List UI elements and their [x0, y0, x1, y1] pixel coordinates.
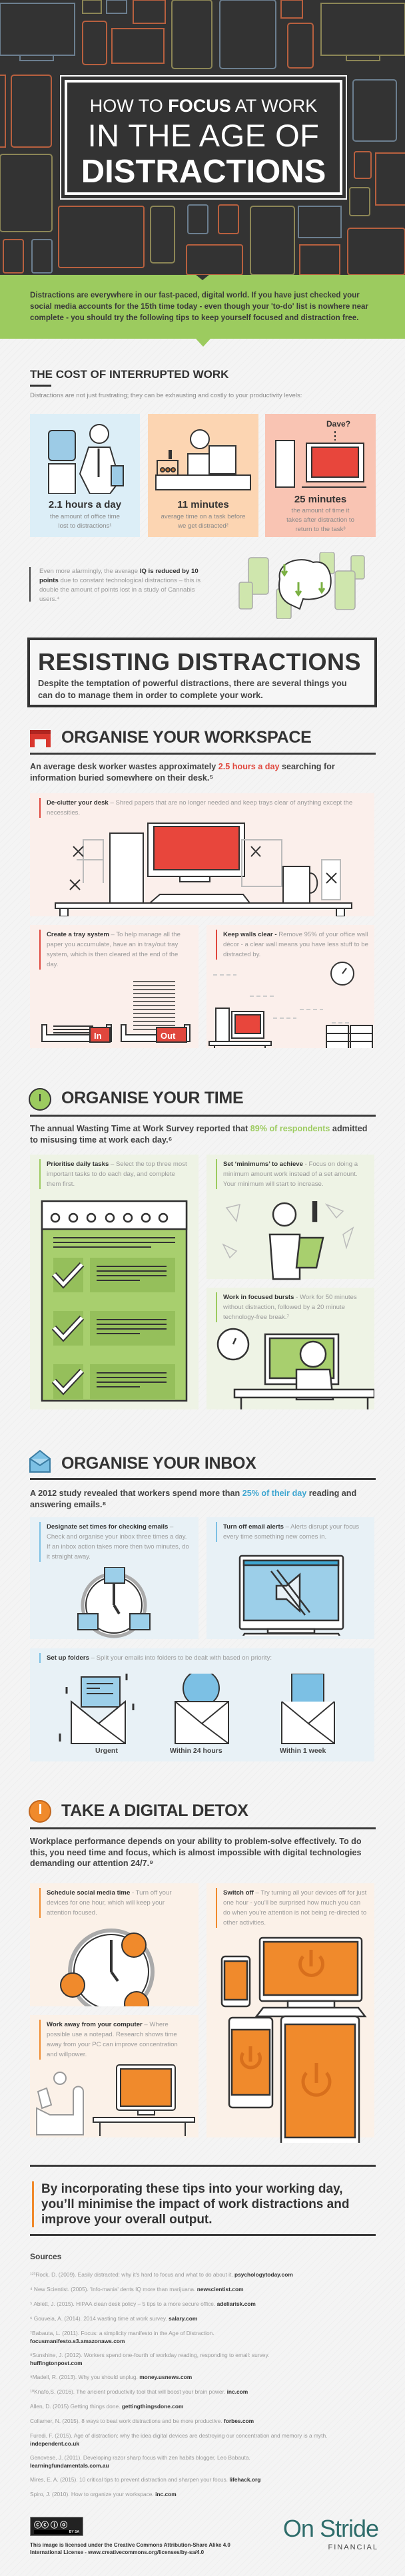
card: 2.1 hours: the amount of office time — [50, 513, 120, 520]
intro green band — [0, 275, 405, 339]
sources list: ⁴ New Scientist. (2005). 'Info-mania' dents IQ more than marijuana. newscientist.com — [30, 2286, 244, 2293]
sources list: ¹²³Rock, D. (2009). Easily distracted: why it's hard to focus and what to do about it. psychologytoday.com — [30, 2271, 293, 2278]
card: 25 minutes: 25 minutes — [294, 494, 346, 505]
icon: orange power — [29, 1800, 51, 1823]
resisting distractions box — [27, 638, 377, 707]
panel: designate set times — [30, 1517, 199, 1639]
panel: set up folders: Within 24 hours — [170, 1747, 222, 1755]
panel: declutter desk — [30, 793, 374, 916]
card: 25 minutes: takes after distraction to — [286, 516, 354, 524]
intro text inbox: A 2012 study revealed that workers spend more than 25% of their day reading and answering emails.⁸ — [30, 1489, 356, 1509]
panel: set up folders — [30, 1648, 374, 1761]
icon: green clock — [29, 1088, 51, 1111]
panel: work away from computer — [30, 2015, 199, 2137]
icon: notepad checklist — [41, 1200, 188, 1401]
panel: set up folders: Set up folders – Split your emails into folders to be dealt with based on priority: — [47, 1654, 272, 1662]
panel: tray system — [30, 925, 199, 1048]
sources list: huffingtonpost.com — [30, 2360, 83, 2366]
panel: tray system: In — [94, 1031, 102, 1041]
panel: designate set times: Designate set times for checking emails – Check and organise your inbox three times a day. If an inbox action takes more then two minutes, do it straight away. — [47, 1523, 189, 1561]
panel: switch off — [206, 1883, 374, 2137]
panel: work away from computer: Work away from your computer – Where possible use a notepad. Research shows time away from your PC can improve concentration and willpower. — [47, 2021, 178, 2058]
sources list: learningfundamentals.com.au — [30, 2462, 109, 2469]
title box: IN THE AGE OF — [88, 118, 319, 153]
section: organise your workspace: ORGANISE YOUR WORKSPACE — [61, 728, 312, 747]
CC license badge: BY SA — [69, 2530, 79, 2534]
card: 2.1 hours: lost to distractions¹ — [59, 522, 111, 530]
sources list: Collamer, N. (2015). 8 ways to beat work distractions and be more productive. forbes.com — [30, 2418, 254, 2424]
header: dark background with device outlines — [0, 0, 405, 275]
sources list: Furedi, F. (2015). Age of distraction: why the idea digital devices are destroying our concentration and memory is a myth. independent.co.uk — [30, 2432, 327, 2447]
title box: HOW TO FOCUS AT WORK — [90, 96, 317, 116]
text: Distractions are not just frustrating; they can be exhausting and costly to your productivity levels: — [30, 392, 302, 399]
panel: turn off alerts: Turn off email alerts – Alerts disrupt your focus every time something new comes in. — [223, 1523, 359, 1541]
title box — [60, 75, 347, 200]
card: 2.1 hours: 2.1 hours a day — [49, 499, 121, 510]
panel: set up folders: Within 1 week — [280, 1747, 326, 1755]
panel: tray system: Create a tray system – To help manage all the paper you accumulate, have an in tray/out tray system, which is then cleared at the end of the day. — [47, 931, 181, 968]
sources list: ⁸Sunshine, J. (2012). Workers spend one-fourth of workday reading, responding to email: survey. — [30, 2352, 269, 2358]
intro green band: Distractions are everywhere in our fast-paced, digital world. If you have just checked your social media accounts for the 15th time today - even though your 'to-do' list is nowhere near complete - you should try the following tips to keep yourself focused and distraction free. — [30, 291, 368, 322]
sources list: Genovese, J. (2011). Developing razor sharp focus with zen habits blogger, Leo Babauta. — [30, 2454, 250, 2461]
panel: prioritise daily tasks — [30, 1155, 199, 1409]
sources list: Mires, E. A. (2015). 10 critical tips to prevent distraction and sharpen your focus. lifehack.org — [30, 2476, 260, 2483]
panel: tray system: Out — [161, 1031, 176, 1041]
panel: declutter desk: De-clutter your desk – Shred papers that are no longer needed and keep trays clear of anything except the necessities. — [47, 799, 352, 817]
card: 25 minutes: return to the task³ — [295, 526, 346, 533]
intro text time: The annual Wasting Time at Work Survey reported that 89% of respondents admitted to misusing time at work each day.⁶ — [30, 1124, 367, 1145]
sources list: Allen, D. (2015) Getting things done. gettingthingsdone.com — [30, 2403, 183, 2410]
card: 25 minutes — [265, 414, 376, 537]
panel: set minimums: Set ‘minimums’ to achieve - Focus on doing a minimum amount work instead of a set amount. Your minimum will start to increase. — [223, 1161, 358, 1188]
sources list: focusmanifesto.s3.amazonaws.com — [30, 2338, 125, 2344]
heading: cost of interrupted work: THE COST OF INTERRUPTED WORK — [30, 368, 228, 381]
title box: DISTRACTIONS — [81, 154, 326, 190]
sources list: Spiro, J. (2010). How to organize your workspace. inc.com — [30, 2491, 177, 2497]
sources list: ¹⁰Knafo,S. (2016). The ancient productivity tool that will boost your brain power. inc.com — [30, 2388, 248, 2395]
panel: schedule social media — [30, 1883, 199, 2006]
license text: This image is licensed under the Creative Commons Attribution-Share Alike 4.0 International License - www.creativecommons.org/licenses/by-sa/4.0 — [30, 2542, 230, 2555]
section: organise your inbox — [29, 1449, 256, 1473]
panel: prioritise daily tasks: Prioritise daily tasks – Select the top three most important tasks to do each day, and complete them first. — [47, 1161, 187, 1188]
CC license badge — [30, 2517, 83, 2536]
conclusion: By incorporating these tips into your working day, you’ll minimise the impact of work distractions and improve your overall output. — [41, 2182, 349, 2227]
logo: On Stride Financial: On Stride — [283, 2515, 378, 2542]
card: 2.1 hours — [30, 414, 140, 537]
card: 11 minutes: 11 minutes — [177, 499, 229, 510]
panel: focused bursts: Work in focused bursts - Work for 50 minutes without distraction, followed by a 20 minute technology-free break.⁷ — [223, 1294, 357, 1321]
panel: schedule social media: Schedule social media time - Turn off your devices for one hour, which will keep your attention focused. — [47, 1889, 172, 1917]
resisting distractions box: RESISTING DISTRACTIONS — [38, 648, 361, 675]
icon: envelope — [29, 1449, 51, 1473]
panel: turn off alerts — [206, 1517, 374, 1639]
section: organise your time: ORGANISE YOUR TIME — [61, 1089, 243, 1107]
panel: set up folders: Urgent — [95, 1747, 118, 1755]
section: take a digital detox: TAKE A DIGITAL DETOX — [61, 1801, 248, 1820]
panel: keep walls clear: Keep walls clear - Remove 95% of your office wall décor - a clear wall means you have less stuff to be distracted by. — [223, 931, 368, 958]
icon: red desk — [30, 730, 51, 747]
logo: On Stride Financial: FINANCIAL — [328, 2543, 378, 2551]
resisting distractions box: Despite the temptation of powerful distractions, there are several things you can do to manage them in order to complete your work. — [38, 678, 347, 700]
sources list: ⁷Babauta, L. (2011). Focus: a simplicity manifesto in the Age of Distraction. — [30, 2330, 214, 2336]
intro text workspace: An average desk worker wastes approximately 2.5 hours a day searching for information buried somewhere on their desk.⁵ — [30, 762, 335, 783]
IQ text block: Even more alarmingly, the average IQ is reduced by 10 points due to constant technological distractions – this is double the amount of points lost in a study of Cannabis users.⁴ — [39, 568, 201, 603]
panel: set minimums — [206, 1155, 374, 1279]
sources list — [30, 2252, 327, 2497]
card: 11 minutes: we get distracted² — [178, 522, 228, 530]
sources list: ⁶ Gouveia, A. (2014). 2014 wasting time at work survey. salary.com — [30, 2315, 197, 2322]
sources list: ⁵ Ablett, J. (2015). HIPAA clean desk policy – 5 tips to a more secure office. adeliarisk.com — [30, 2300, 256, 2307]
sources list: Sources — [30, 2252, 61, 2261]
panel: switch off: Switch off – Try turning all your devices off for just one hour - you'll be surprised how much you can do when you're attention is not being re-directed to other activities. — [223, 1889, 366, 1927]
intro text detox: Workplace performance depends on your ability to problem-solve effectively. To do this, you need time and focus, which is almost impossible with digital technologies demanding our attention 24/7.⁹ — [30, 1837, 362, 1868]
panel: focused bursts — [206, 1288, 374, 1409]
icon: orange devices — [221, 1936, 366, 2143]
card: 25 minutes: the amount of time it — [292, 507, 349, 514]
CC license badge: ⓒⓒ ⓘ ⓞ — [34, 2521, 67, 2529]
sources list: ⁹Madell, R. (2013). Why you should unplug. money.usnews.com — [30, 2374, 192, 2380]
card: 11 minutes — [148, 414, 258, 537]
panel: keep walls clear — [206, 925, 374, 1048]
section: organise your inbox: ORGANISE YOUR INBOX — [61, 1454, 256, 1473]
card: 25 minutes: Dave? — [326, 419, 350, 429]
conclusion — [30, 2165, 376, 2236]
card: 11 minutes: average time on a task before — [161, 513, 245, 520]
icon: brain with phones — [238, 552, 365, 619]
